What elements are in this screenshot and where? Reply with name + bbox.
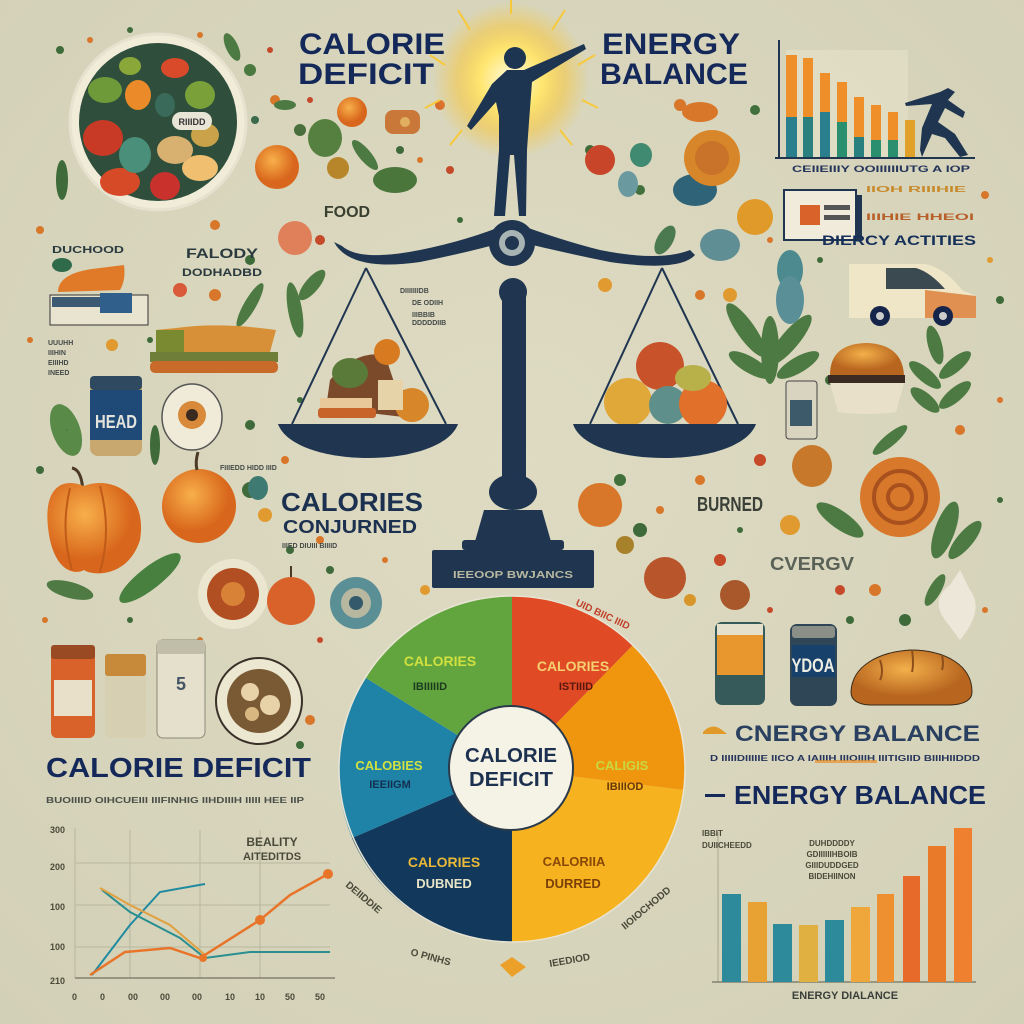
small text scraps left: DDDDDIIB	[412, 320, 446, 327]
pie segment labels: ISTIIID	[559, 681, 593, 693]
small text scraps left: IIIHIN	[48, 350, 66, 357]
pie segment labels: CALORIES	[404, 653, 476, 669]
bottom-right bar chart	[702, 828, 976, 1002]
pie caption arcs: IIOIOCHODD	[620, 885, 673, 932]
center bottom orange mark	[500, 957, 526, 977]
icon: leaves group	[44, 31, 987, 610]
pie segment labels: DUBNED	[416, 876, 472, 891]
bowl of salad	[70, 34, 246, 210]
small text scraps left: INEED	[48, 370, 69, 377]
pie segment labels: IBIIIIID	[413, 681, 447, 693]
heading: calories consumed: CALORIES	[281, 487, 423, 517]
line chart: 300	[50, 825, 65, 835]
sign board and activities label: DIERCY ACTITIES	[822, 232, 976, 248]
small text scraps left: CEIIEIIIY OOIIIIIIUTG A IOP	[792, 164, 970, 174]
line chart: 10	[255, 992, 265, 1002]
burger and can	[786, 343, 905, 439]
pie caption arcs: O PINHS	[409, 947, 452, 969]
food illustrations top left	[255, 97, 420, 255]
title: calorie deficit	[298, 28, 445, 91]
bottom-right bar chart: ENERGY DIALANCE	[792, 990, 898, 1002]
pie segment labels: CALOBIES	[355, 758, 423, 773]
line chart: 0	[72, 992, 77, 1002]
line chart: 50	[285, 992, 295, 1002]
heading: energy balance rows	[703, 721, 986, 810]
small text scraps left: DIIIIIIIDB	[400, 288, 429, 295]
jars bottom left	[51, 640, 302, 744]
pie segment labels: IEEIIGM	[369, 779, 411, 791]
van	[849, 264, 976, 326]
line chart: 0	[100, 992, 105, 1002]
line chart: AITEDITDS	[243, 851, 301, 863]
jar: head	[90, 376, 142, 456]
scale: IEEOOP BWJANCS	[453, 570, 573, 581]
jars and bread right: YDOA	[792, 656, 835, 677]
figure: silhouette on scale	[467, 44, 586, 216]
bottom-right bar chart: GIIIDUDDGED	[805, 861, 859, 870]
bottom-right bar chart: IBBIT	[702, 829, 723, 838]
line chart: BEALITY	[246, 835, 298, 849]
small text scraps left: IIIBBIB	[412, 312, 435, 319]
pie centre label: DEFICIT	[469, 769, 553, 791]
heading: burned: BURNED	[697, 494, 763, 516]
line chart: 00	[128, 992, 138, 1002]
title: energy balance: BALANCE	[600, 58, 748, 91]
small text scraps left	[48, 164, 974, 550]
pie centre label: CALORIE	[465, 745, 557, 767]
heading: calorie deficit large: CALORIE DEFICIT	[46, 752, 311, 783]
scattered food confetti	[27, 27, 1004, 749]
small text scraps left: FIIIEDD HIDD IIID	[220, 465, 277, 472]
title: energy balance: ENERGY	[602, 28, 740, 61]
top-right bar chart	[775, 40, 975, 158]
line chart: 200	[50, 862, 65, 872]
bowl of salad: RIIIDD	[178, 117, 206, 127]
heading: energy faint: CVERGV	[770, 554, 854, 574]
jars bottom left: 5	[176, 674, 186, 694]
pie segment labels: CALORIES	[408, 854, 480, 870]
left labels: DUCHOOD	[52, 245, 124, 256]
pie segment labels: CALIGIS	[596, 758, 649, 773]
subtext left: BUOIIIID OIHCUEIII IIIFINHIG IIHDIIIH IIIII HEE IIP	[46, 796, 305, 805]
heading: calories consumed: CONJURNED	[283, 517, 417, 537]
line chart: 00	[192, 992, 202, 1002]
scale	[334, 220, 695, 588]
pie caption arcs: UID BIIC IIID	[574, 598, 631, 632]
line chart: 10	[225, 992, 235, 1002]
line chart: 00	[160, 992, 170, 1002]
heading: energy balance rows: CNERGY BALANCE	[735, 721, 980, 746]
bottom-right bar chart: DUHDDDDY	[809, 839, 856, 848]
heading: calories consumed	[281, 487, 423, 537]
food illustrations top left: FOOD	[324, 204, 370, 221]
title: calorie deficit: CALORIE	[299, 28, 445, 61]
pie segment labels: CALORIIA	[543, 854, 606, 869]
line chart: 210	[50, 976, 65, 986]
fruit: pumpkin and apple	[47, 452, 382, 629]
small text scraps left: DE ODIIH	[412, 300, 443, 307]
bottom-right bar chart: GDIIIIIIHBOIB	[806, 850, 858, 859]
heading: energy balance rows: D IIIIIDIIIIIE IICO A IAIIIH IIIOIIIH IIITIGIID BIIIHIIDDD	[710, 754, 980, 763]
pie segment labels: CALORIES	[537, 658, 609, 674]
line chart: 50	[315, 992, 325, 1002]
line chart: 100	[50, 942, 65, 952]
pie segment labels: DURRED	[545, 876, 601, 891]
left labels	[52, 245, 262, 279]
jars and bread right	[715, 622, 972, 706]
jar: head: HEAD	[95, 412, 137, 432]
small text scraps left: IIIHIE HHEOI	[866, 212, 974, 222]
pie caption arcs: IEEDIOD	[549, 952, 591, 970]
small text scraps left: EIIIHD	[48, 360, 69, 367]
left labels: DODHADBD	[182, 267, 262, 279]
left scale pan with food	[278, 268, 458, 458]
sunburst behind figure	[425, 0, 598, 158]
pie caption arcs	[343, 598, 673, 970]
pie chart	[339, 596, 685, 942]
right fruits	[578, 102, 976, 640]
left food items	[50, 265, 278, 450]
dancer silhouette	[905, 88, 968, 157]
pie centre label	[465, 745, 557, 791]
pie segment labels	[355, 653, 649, 891]
title: calorie deficit: DEFICIT	[298, 58, 434, 91]
pie segment labels: IBIIIOD	[607, 781, 643, 793]
right scale pan with fruit	[573, 268, 756, 458]
heading: energy balance rows: ENERGY BALANCE	[734, 780, 986, 810]
sign board and activities label	[784, 190, 976, 248]
left labels: FALODY	[186, 245, 259, 261]
pie caption arcs: DEIIDDIE	[343, 880, 384, 916]
title: energy balance	[600, 28, 748, 91]
line chart	[50, 825, 335, 1002]
line chart: 100	[50, 902, 65, 912]
bottom-right bar chart: DUIICHEEDD	[702, 841, 752, 850]
small text scraps left: IIOH RIIIHIE	[866, 185, 967, 194]
small text scraps left: UUUHH	[48, 340, 73, 347]
bottom-right bar chart: BIDEHIINON	[808, 872, 856, 881]
small text scraps left: IIIED DIUIII BIIIID	[282, 543, 337, 550]
